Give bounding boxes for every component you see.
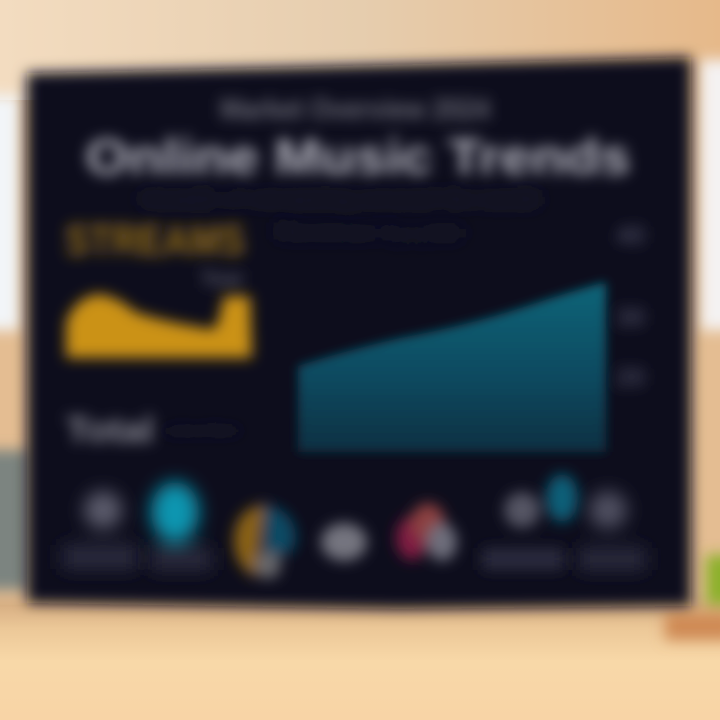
gold area chart (66, 294, 252, 358)
caption under title: Growth of streaming around the world (140, 186, 540, 213)
dark display panel (27, 57, 691, 609)
stat label lower left: Total (66, 409, 154, 450)
icon: rising line (482, 474, 578, 570)
icon: red and blue cluster (396, 503, 457, 561)
panel: gold statistic (65, 216, 252, 358)
chart caption: Revenue by year (275, 216, 465, 246)
title block (86, 93, 630, 213)
subtitle above title: Market Overview 2024 (220, 93, 490, 126)
icon: teal circle (150, 482, 212, 570)
gold heading: STREAMS (65, 216, 245, 265)
icon: right item (578, 491, 646, 570)
icon: multicolour donut (234, 504, 296, 579)
stat label lower left (66, 409, 240, 450)
stat label lower left: subscribers (165, 420, 240, 440)
chart axis labels: 40 (616, 220, 645, 250)
icon: left item (62, 491, 138, 569)
main title: Online Music Trends (86, 129, 630, 185)
chart axis labels: 20 (616, 362, 645, 392)
chart axis labels (616, 220, 645, 392)
small label: Year (200, 263, 244, 293)
teal area chart (298, 282, 606, 452)
chart axis labels: 30 (616, 302, 645, 332)
bottom icon row (62, 474, 646, 579)
icon: label block (321, 523, 367, 561)
